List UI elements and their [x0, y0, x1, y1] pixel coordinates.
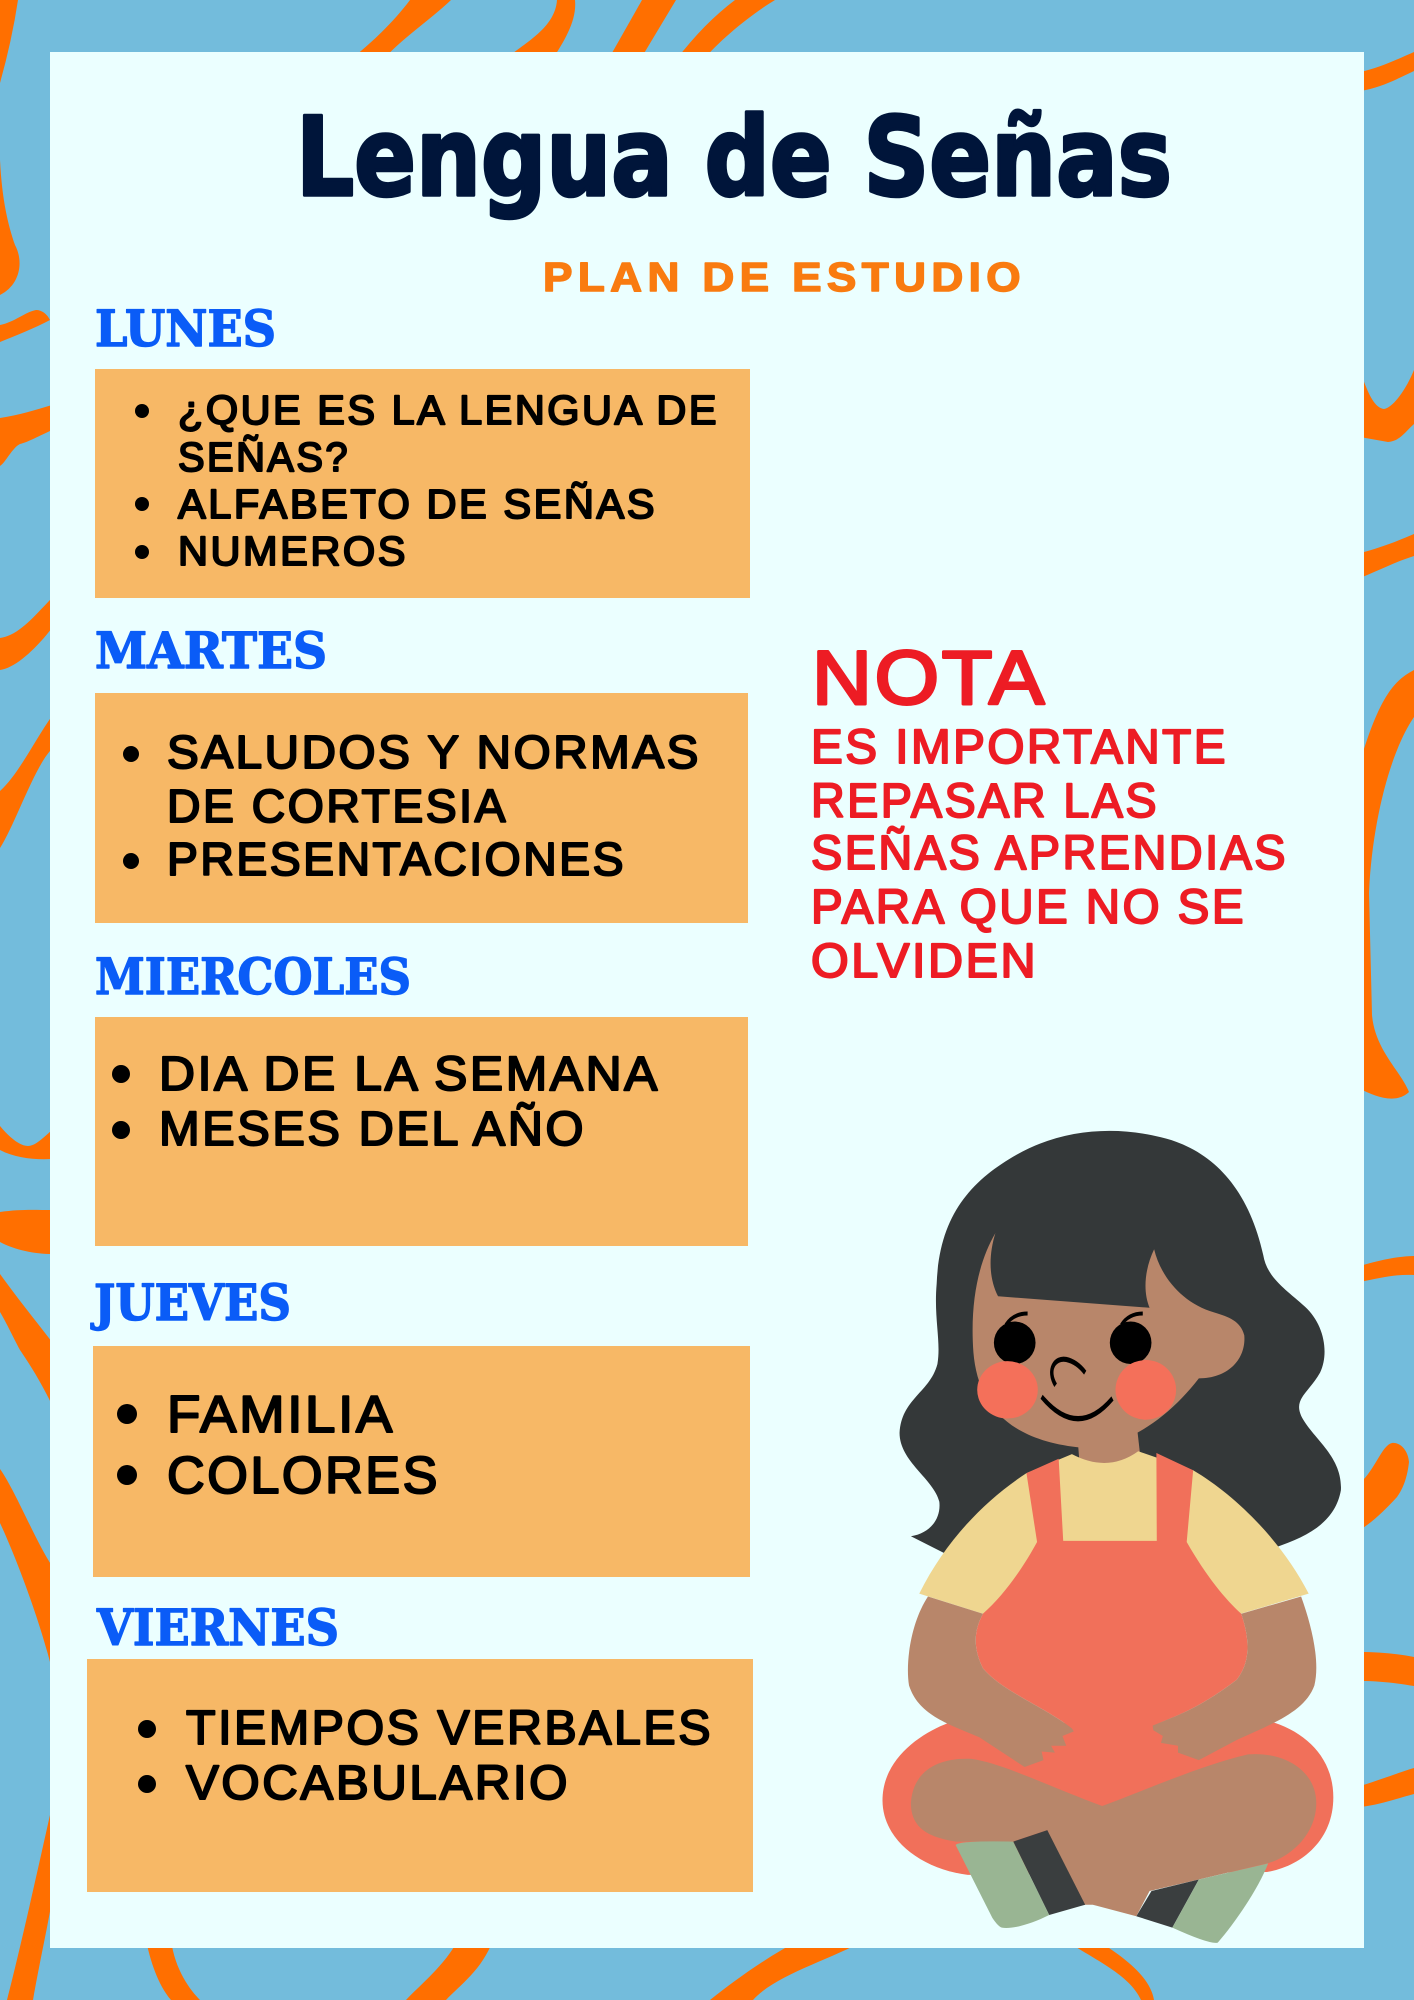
box: viernes topics: VOCABULARIO [186, 1757, 570, 1810]
heading: lunes: LUNES [95, 299, 276, 358]
socks [1013, 1830, 1199, 1928]
day block: miercoles [95, 947, 748, 1246]
box: jueves topics [93, 1346, 750, 1577]
box: miercoles topics: MESES DEL AÑO [159, 1102, 586, 1156]
box: lunes topics: ALFABETO DE SEÑAS [178, 481, 657, 527]
day block: jueves [90, 1273, 750, 1577]
legs [911, 1754, 1316, 1916]
dress [976, 1453, 1248, 1806]
box: viernes topics [87, 1659, 753, 1892]
eyes [994, 1314, 1151, 1364]
heading: viernes: VIERNES [96, 1598, 339, 1657]
note body: ES IMPORTANTE [811, 721, 1228, 774]
note callout [811, 636, 1288, 988]
box: lunes topics: NUMEROS [178, 528, 408, 574]
illustration: seated girl [883, 1131, 1341, 1943]
note body: SEÑAS APRENDIAS [811, 826, 1288, 880]
mouth [1042, 1397, 1112, 1419]
note heading: NOTA [812, 636, 1047, 721]
day block: viernes [87, 1598, 753, 1892]
note body: REPASAR LAS [811, 775, 1159, 828]
shoes [956, 1841, 1268, 1943]
box: lunes topics: SEÑAS? [178, 434, 350, 480]
box: martes topics [95, 693, 748, 923]
neck [1078, 1421, 1140, 1465]
note body: PARA QUE NO SE [811, 881, 1246, 934]
day block: martes [95, 621, 748, 923]
box: martes topics: SALUDOS Y NORMAS [167, 726, 701, 778]
hair [900, 1131, 1341, 1571]
box: miercoles topics [95, 1017, 748, 1246]
note body: OLVIDEN [811, 935, 1038, 988]
shirt [919, 1451, 1309, 1614]
box: martes topics: PRESENTACIONES [167, 833, 626, 885]
face [973, 1233, 1244, 1447]
box: lunes topics: ¿QUE ES LA LENGUA DE [178, 387, 719, 433]
box: jueves topics: COLORES [167, 1447, 440, 1505]
nose [1052, 1359, 1085, 1385]
box: jueves topics: FAMILIA [167, 1386, 395, 1444]
box: lunes topics [95, 369, 750, 598]
heading: jueves: JUEVES [90, 1273, 291, 1332]
box: martes topics: DE CORTESIA [167, 780, 508, 832]
box: miercoles topics: DIA DE LA SEMANA [159, 1048, 660, 1101]
heading: miercoles: MIERCOLES [95, 947, 411, 1006]
subtitle: PLAN DE ESTUDIO [543, 254, 1026, 300]
title: Lengua de Señas [296, 94, 1172, 221]
cheeks [977, 1360, 1176, 1420]
heading: martes: MARTES [95, 621, 327, 680]
note body [811, 721, 1288, 988]
skirt [883, 1723, 1333, 1875]
day block: lunes [95, 299, 750, 598]
arms [908, 1596, 1316, 1767]
box: viernes topics: TIEMPOS VERBALES [186, 1702, 713, 1755]
